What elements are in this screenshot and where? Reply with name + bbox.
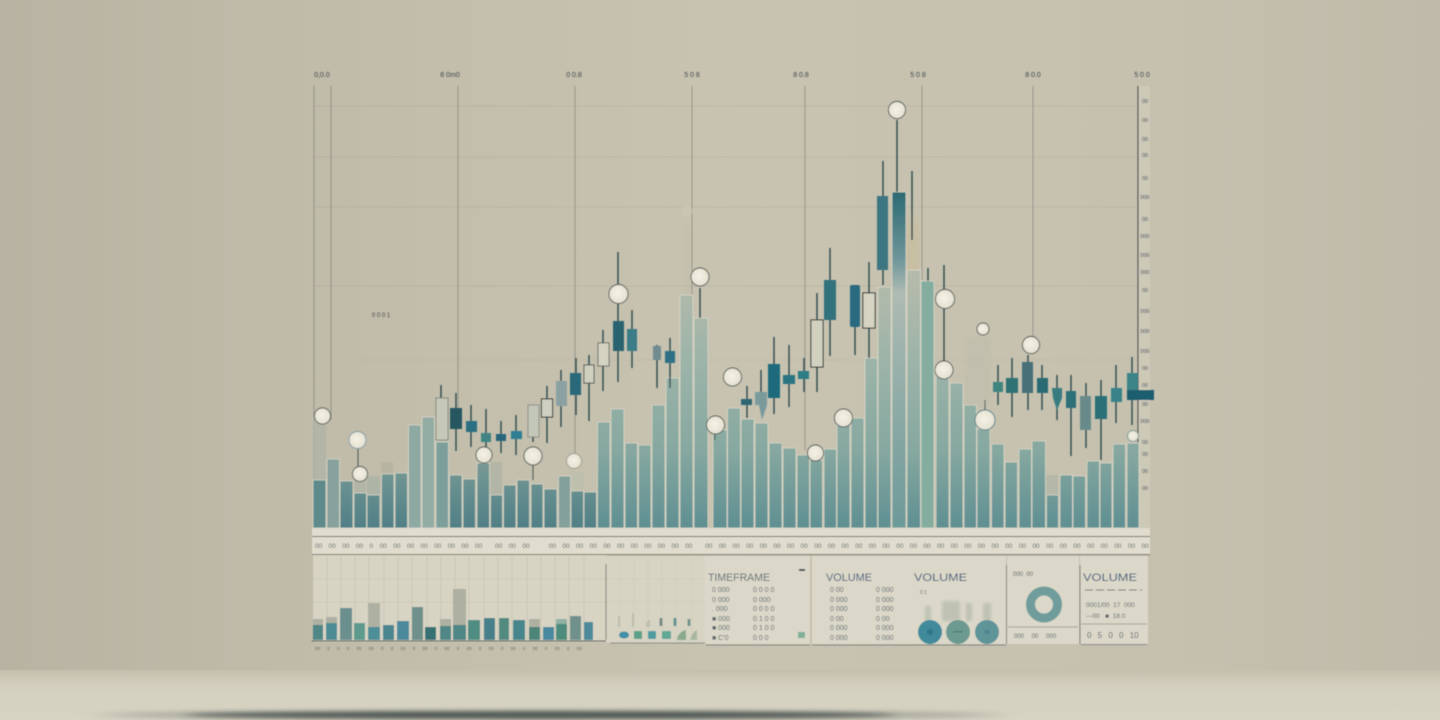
volume bars: left series (313, 417, 596, 528)
panel: timeframe table: 0 000 (712, 587, 730, 594)
right price axis: 00 (1142, 366, 1148, 372)
volume bars: right series (598, 192, 1139, 528)
panel: timeframe table: ■ 000 (712, 625, 730, 632)
right price axis: 00 (1142, 383, 1148, 389)
small chart note: 0 0 0 1 (372, 313, 391, 319)
panel: timeframe table: 0 0 0 (753, 635, 769, 642)
panel: timeframe table: 0 000 (712, 597, 730, 604)
right price axis: 00 (1142, 452, 1148, 458)
panel: timeframe table: TIMEFRAME (708, 572, 770, 584)
right price axis: 00 (1142, 176, 1148, 182)
main chart (312, 72, 1154, 651)
panel: timeframe table (705, 556, 810, 645)
panel: timeframe table: ■ 000 (712, 616, 730, 623)
top date axis labels: 5 0 8 (684, 72, 700, 79)
candlestick bodies (436, 196, 1138, 442)
top date axis labels: 5 0 8 (910, 72, 926, 79)
panel: volume tables: 0 000 (876, 587, 894, 594)
panel: volume tables: 0 000 (830, 625, 848, 632)
panel: volume tables: 0 00 (830, 616, 844, 623)
panel: small bars and swatches (607, 556, 705, 643)
right price axis: 000 (1140, 253, 1150, 259)
panel: volume tables: VOLUME (914, 572, 967, 584)
panel: volume tables: 0 000 (876, 597, 894, 604)
panel: volume tables (812, 556, 1006, 645)
panel: volume summary: VOLUME (1083, 572, 1137, 584)
right price axis: 00 (1142, 118, 1148, 124)
panel: volume tables: 0 1 (920, 590, 927, 596)
right price axis: 000 (1140, 349, 1150, 355)
panel: volume tables: 0 000 (830, 635, 848, 642)
panel: volume tables: 0 00 (876, 616, 890, 623)
right price axis: 000 (1140, 419, 1150, 425)
volume bars: faded tops (313, 398, 1058, 528)
volume mini bars (925, 601, 991, 622)
panel: history bar chart (312, 555, 607, 651)
right price axis: 000 (1140, 234, 1150, 240)
panel: volume tables: VOLUME (826, 572, 872, 584)
right price axis: 00 (1142, 137, 1148, 143)
right price axis: 00 (1142, 486, 1148, 492)
right price axis: 00 (1142, 153, 1148, 159)
right price axis: 000 (1140, 195, 1150, 201)
donut ring (1030, 591, 1058, 618)
panel: volume summary: ---00 ■ 18.0 (1086, 613, 1126, 620)
right price axis: 000 (1140, 309, 1150, 315)
panel: donut: 000 00 (1013, 572, 1034, 578)
panel: donut: 000 00 000 (1014, 634, 1057, 640)
panel: timeframe table: ■ C'0 (712, 635, 729, 642)
right price axis: 00 (1142, 217, 1148, 223)
panel: volume summary: 0 5 0 0 10 (1087, 631, 1139, 640)
date axis strip: 00 00 00 00 0 00 00 00 00 00 00 00 00 00 00 00 00 00 00 00 00 00 00 00 00 00 00 00 00 00 00 00 00 00 00 00 00 00 00 00 00 00 00 00 00 00 00 00 00 00 00 00 00 00 00 00 00 00 00 00 (315, 543, 1149, 550)
panel: volume tables: 0 000 (830, 606, 848, 613)
top date axis labels: 0,0.0 (314, 72, 330, 79)
panel: volume tables: 0 000 (876, 635, 894, 642)
top date axis labels: 5 0 0 (1134, 72, 1150, 79)
panel: timeframe table: 0 000 (753, 597, 771, 604)
right price axis: 000 (1140, 270, 1150, 276)
panel: history bar chart: 00 0 0 0 00 00 0 0 00 0 00 0 00 0 00 0 00 0 00 0 00 0 00 0 00 (315, 646, 582, 651)
top date axis labels: 8 0.8 (793, 72, 809, 79)
right price axis: 00 (1142, 440, 1148, 446)
top date axis labels: 8 0m0 (440, 72, 460, 79)
panel: volume summary (1080, 556, 1148, 644)
right price axis: 00 (1142, 469, 1148, 475)
panel: timeframe table: 0 0 0 0 (753, 606, 775, 613)
panel: timeframe table: 0 1 0 0 (753, 625, 775, 632)
top date axis labels (314, 72, 1150, 79)
top date axis labels: 0 0.8 (566, 72, 582, 79)
panel: volume summary: 0001/00 17 000 (1086, 602, 1135, 609)
right price axis: 00 (1142, 402, 1148, 408)
panel: volume tables: 0 000 (876, 606, 894, 613)
date axis strip (312, 528, 1150, 554)
panel: timeframe table: 0 1 0 0 (753, 616, 775, 623)
panel: timeframe table: . 000 (712, 606, 728, 613)
top date axis labels: 8 0.0 (1025, 72, 1041, 79)
candlestick wicks (441, 120, 1132, 460)
floor band and shadow (0, 670, 1440, 720)
panel: timeframe table: 0 0 0 0 (753, 587, 775, 594)
panel: donut (1006, 556, 1079, 644)
panel: volume tables: 0 00 (830, 587, 844, 594)
panel: volume tables: 0 000 (830, 597, 848, 604)
right price axis: 000 (1140, 329, 1150, 335)
price tag (1127, 390, 1154, 400)
right price axis (1138, 86, 1150, 528)
right price axis: 00 (1142, 99, 1148, 105)
volume dials (918, 620, 999, 644)
event markers (314, 102, 1138, 482)
right price axis: 00 (1142, 288, 1148, 294)
panel: volume tables: 0 000 (876, 625, 894, 632)
ghost glow behind tall bars (681, 205, 990, 408)
price grid lines (314, 86, 1138, 530)
